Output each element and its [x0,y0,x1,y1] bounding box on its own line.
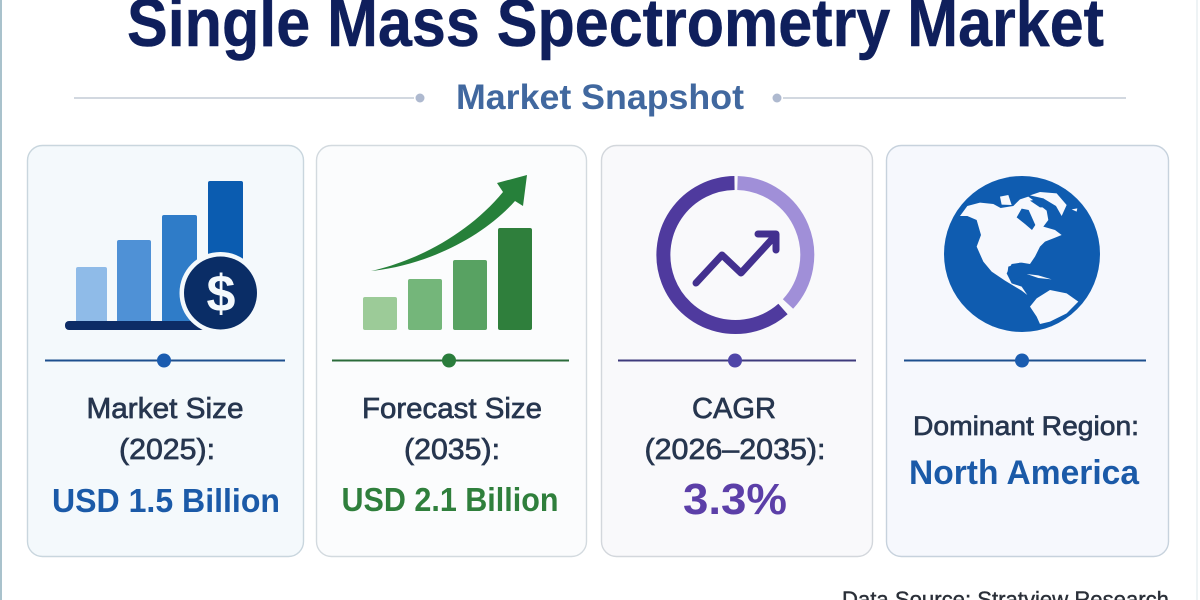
icon: ring with trend arrow [663,183,807,327]
panel: forecast size [316,146,586,556]
panel: market size [28,146,304,556]
text: market size label: Market Size [86,393,244,425]
text: dominant region label: Dominant Region: [913,411,1139,441]
panel: CAGR [602,146,872,556]
text: forecast size label: (2035): [404,434,500,466]
text: forecast size label [362,393,542,466]
value: North America: North America [909,454,1140,492]
icon: green bars with rising arrow [363,175,532,330]
icon: bar chart with dollar coin: $ [207,265,236,323]
subtitle: Market Snapshot [74,78,1126,117]
icon: bar chart with dollar coin [65,181,262,334]
text: market size label: (2025): [119,434,215,466]
value: USD 1.5 Billion: USD 1.5 Billion [52,482,280,519]
divider [904,354,1146,368]
subtitle: Market Snapshot: Market Snapshot [456,78,744,117]
text: forecast size label: Forecast Size [362,393,542,425]
value: USD 2.1 Billion: USD 2.1 Billion [342,481,558,518]
text: CAGR label [644,393,826,466]
icon: globe [944,176,1100,332]
divider [618,354,856,368]
divider [332,354,569,368]
text: CAGR label: (2026–2035): [644,434,826,466]
text: CAGR label: CAGR [692,393,776,425]
divider [45,354,285,368]
value: 3.3%: 3.3% [683,475,787,524]
text: market size label [86,393,244,466]
panel: dominant region [886,146,1168,556]
